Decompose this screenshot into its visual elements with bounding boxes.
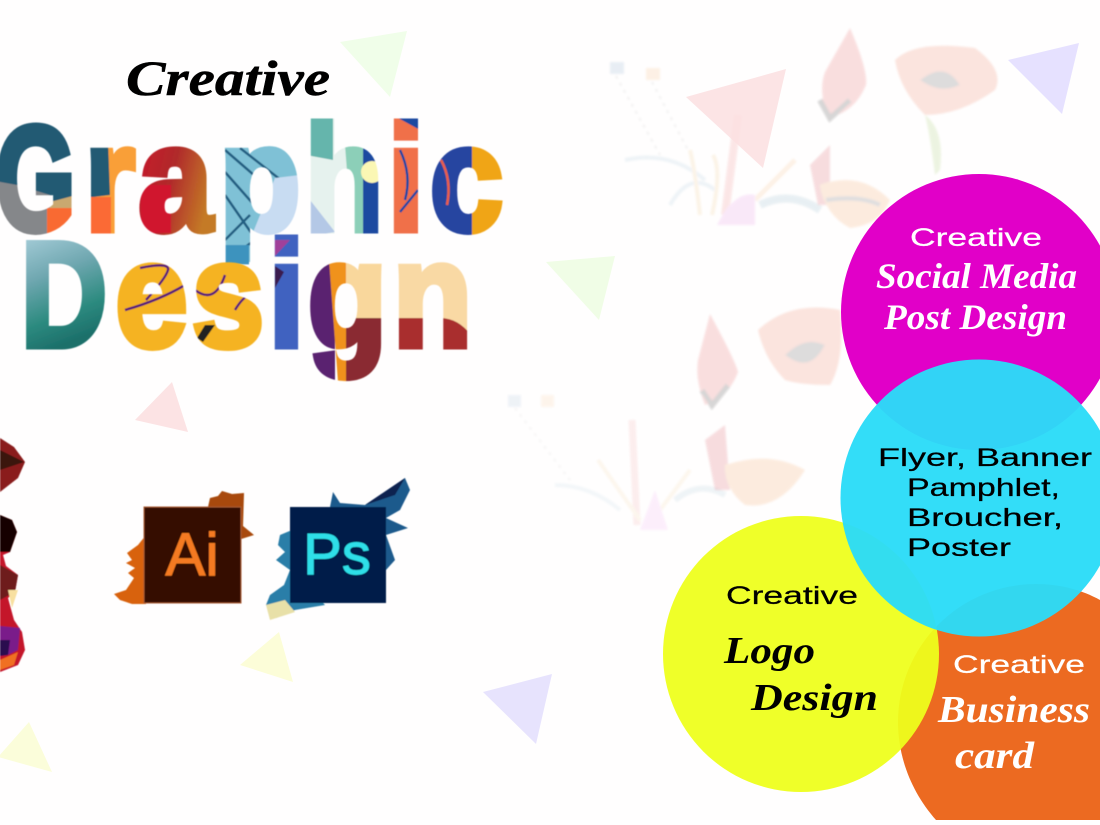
faint background illustration: lower pens and pot xyxy=(508,395,725,530)
label: Social Media Post Design xyxy=(876,256,1077,337)
label: Logo Design: Logo xyxy=(723,630,815,672)
decorative triangle: pale red xyxy=(686,69,786,168)
panel: creative logo design xyxy=(663,516,939,792)
panel: flyer, banner, pamphlet, broucher, poster xyxy=(840,360,1100,636)
decorative triangle: pale yellow bottom left xyxy=(0,722,52,772)
icon: Adobe Illustrator: Ai xyxy=(165,521,219,588)
decorative triangle: pale yellow xyxy=(240,632,293,682)
bottom white strip xyxy=(0,820,1100,825)
panel: creative business card xyxy=(898,584,1100,820)
faint background illustration: upper face xyxy=(810,28,998,228)
label: list of print products: Poster xyxy=(907,534,1011,562)
label: Logo Design: Design xyxy=(750,677,878,719)
decorative triangle: lavender bottom xyxy=(483,674,552,744)
label: list of print products: Broucher, xyxy=(907,504,1063,532)
heading: Graphic xyxy=(0,115,508,265)
label: Creative: Creative xyxy=(910,224,1042,252)
label: Logo Design xyxy=(723,630,878,719)
decorative triangle: pink xyxy=(135,382,188,432)
icon: Adobe Photoshop xyxy=(266,478,410,620)
label: Creative: Creative xyxy=(953,651,1085,679)
faint background illustration: upper pens and pot xyxy=(610,62,820,225)
decorative triangle: lavender top right xyxy=(1008,43,1079,114)
decorative triangle: pale green top xyxy=(340,31,407,97)
faint background illustration: lower face xyxy=(697,308,841,506)
label: Social Media Post Design: Post Design xyxy=(883,297,1067,337)
heading: Design xyxy=(20,234,471,382)
panel: creative social media post design xyxy=(841,174,1100,450)
label: list of print products: Flyer, Banner xyxy=(878,444,1092,472)
label: Business card xyxy=(937,689,1090,777)
decorative triangle: pale green middle xyxy=(546,256,615,320)
label: Business card: Business xyxy=(937,689,1090,731)
icon: Adobe Photoshop: Ps xyxy=(303,522,371,587)
label: Creative: Creative xyxy=(726,582,858,610)
label: list of print products: Pamphlet, xyxy=(907,474,1060,502)
label: Business card: card xyxy=(955,735,1035,777)
label: Social Media Post Design: Social Media xyxy=(876,256,1077,296)
heading: Creative: Creative xyxy=(126,50,330,106)
abstract art cropped at left edge xyxy=(0,438,25,672)
label: list of print products xyxy=(878,444,1092,562)
icon: Adobe Illustrator xyxy=(114,491,254,604)
